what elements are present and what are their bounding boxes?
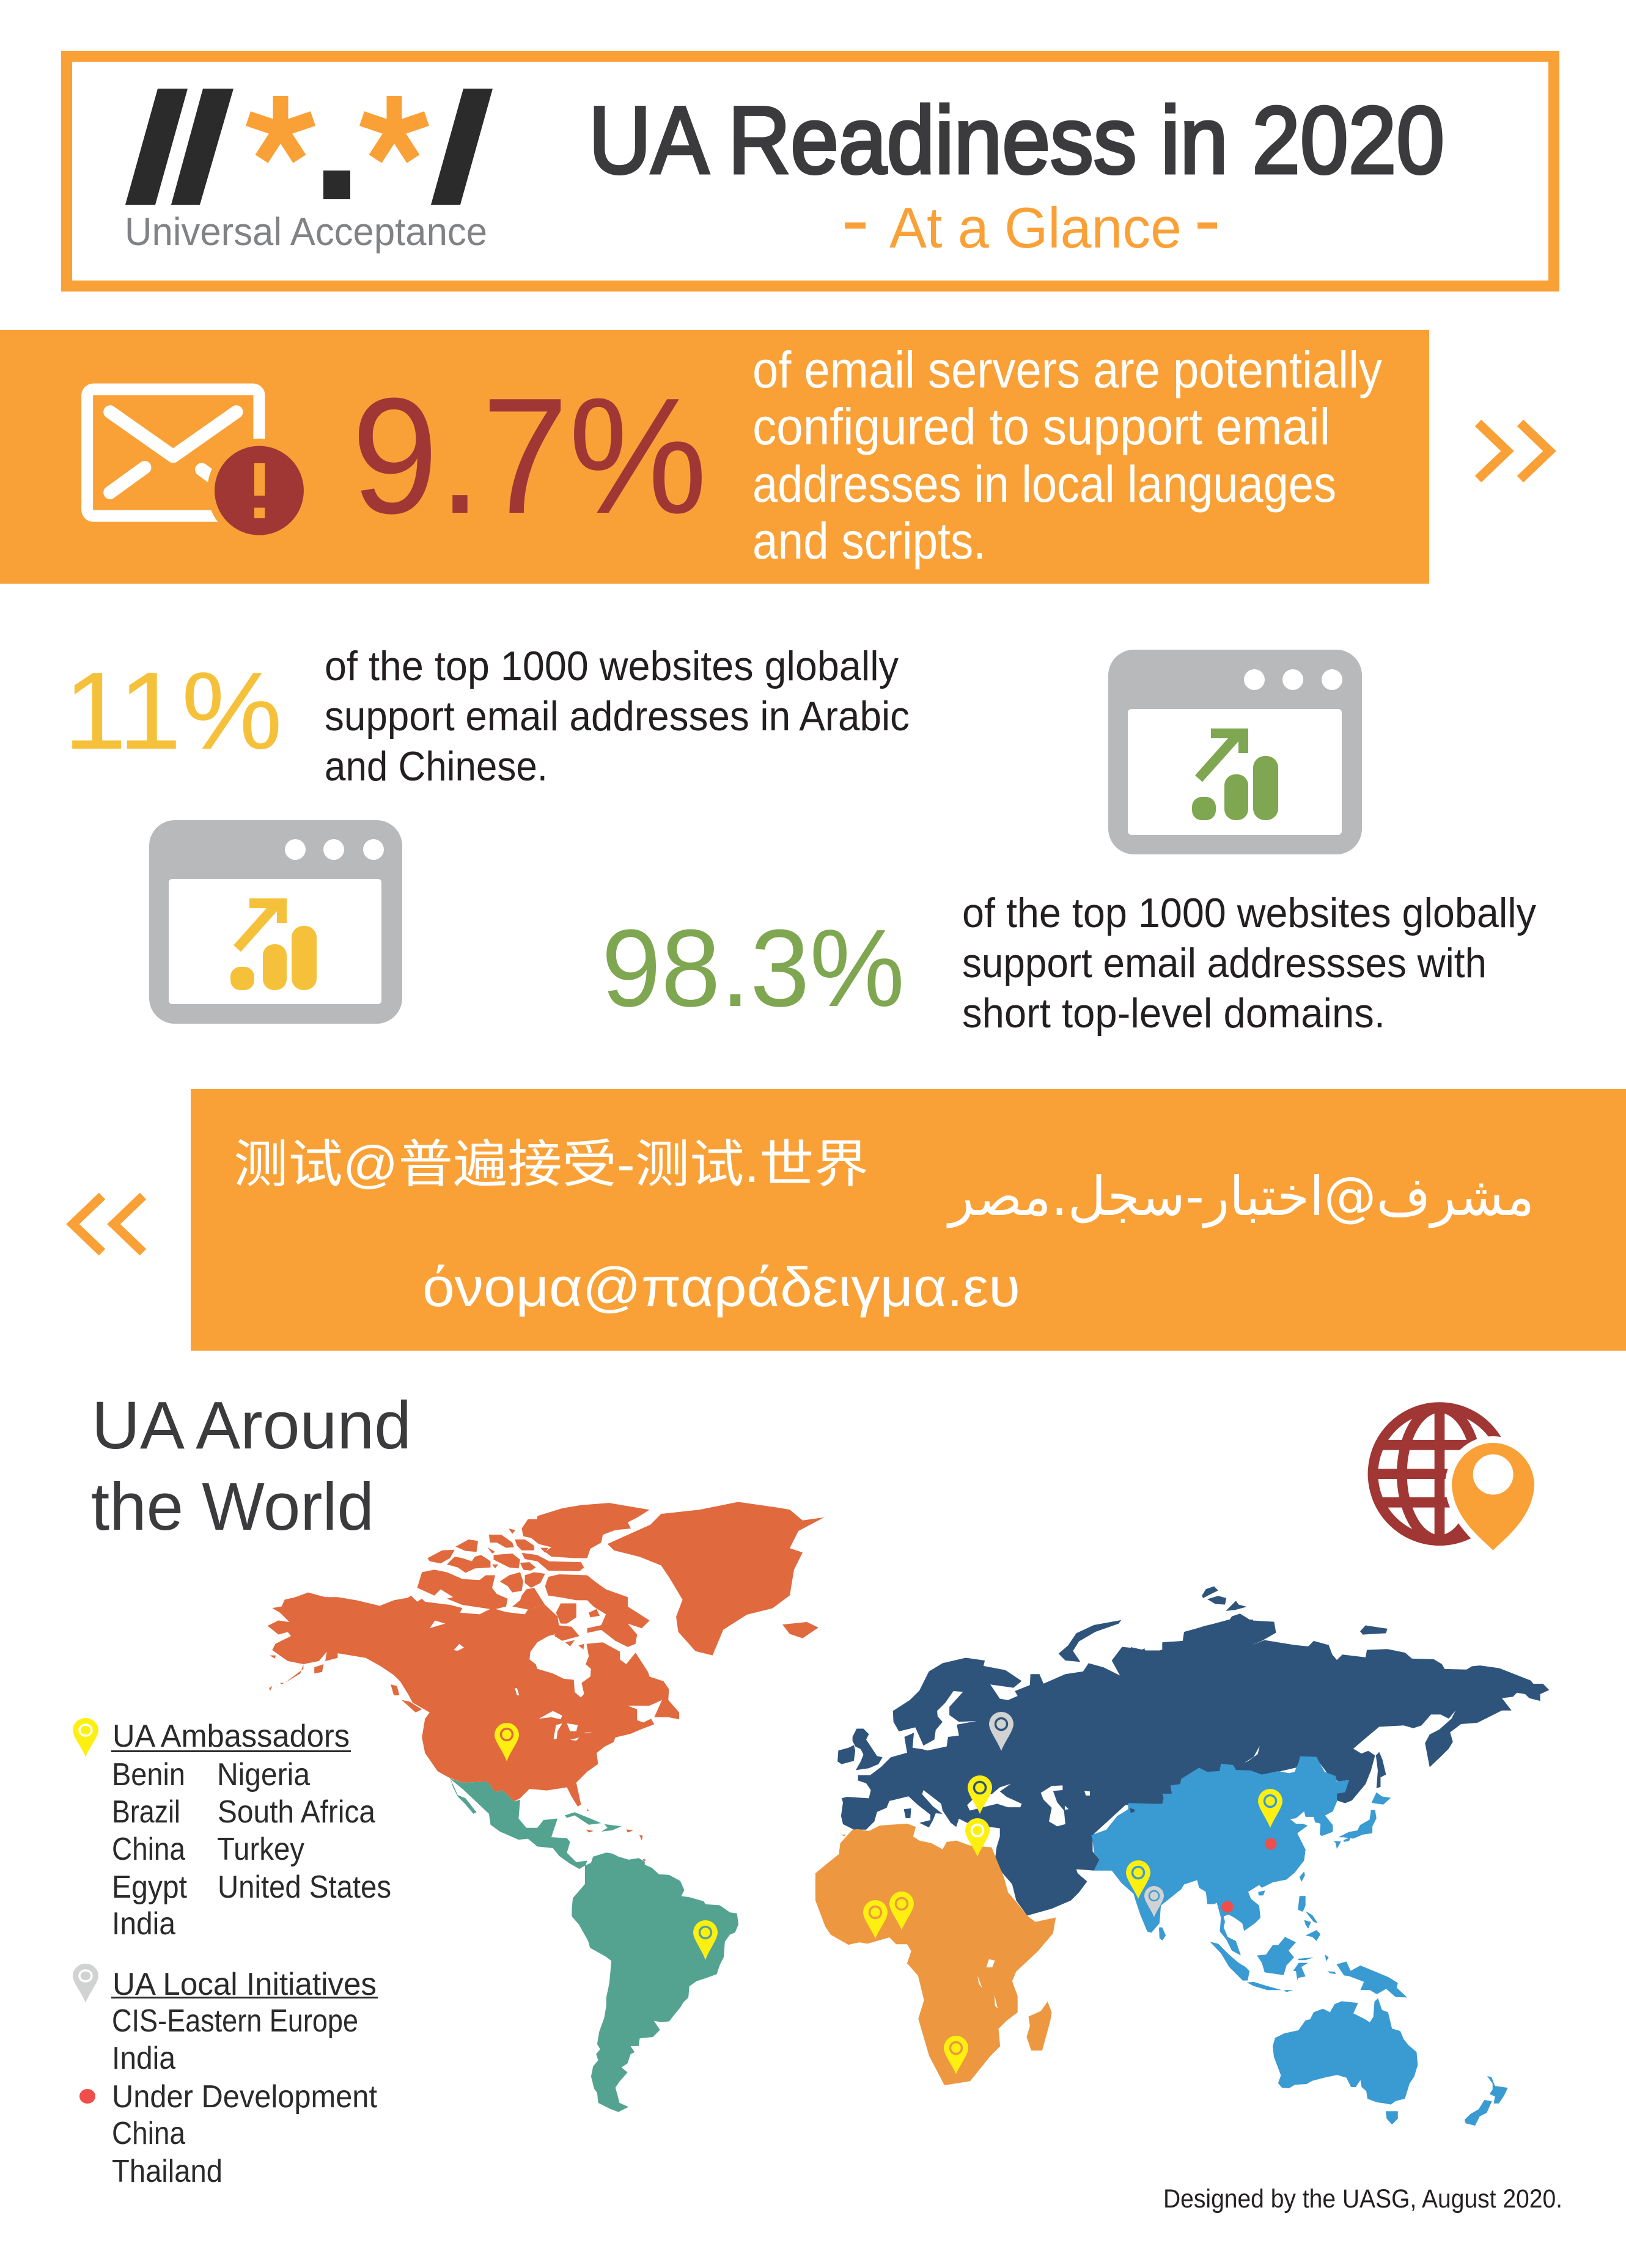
legend: local initiatives list: [112, 2003, 358, 2076]
text: 11% description: of the top 1000 websites globally: [325, 643, 899, 689]
legend: under development marker: [79, 2089, 95, 2104]
text: 98.3% description: [962, 890, 1536, 1037]
legend: ambassadors list: Turkey: [217, 1832, 304, 1867]
legend: ambassadors list: Nigeria: [217, 1757, 310, 1793]
stat 98.3%: 98.3%: [601, 907, 905, 1030]
pin: United States: [495, 1723, 519, 1761]
stat 9.7%: 9.7%: [351, 364, 707, 548]
heading: UA Around the World: UA Around: [92, 1388, 411, 1463]
text: 11% description: support email addresses in Arabic: [325, 693, 910, 739]
logo mark: [125, 89, 493, 205]
legend: [73, 1718, 391, 2189]
pin: India local initiative: [1144, 1886, 1164, 1917]
legend: ambassadors list: United States: [218, 1870, 391, 1905]
pin: Brazil: [693, 1920, 718, 1960]
stat description: addresses in local languages: [752, 455, 1336, 513]
map: Greenland and Iceland: [608, 1502, 824, 1656]
world map: [268, 1502, 1549, 2126]
icon: envelope with alert: [87, 389, 311, 543]
title: UA Readiness in 2020: [589, 87, 1444, 194]
panel: email stat band: [0, 330, 1429, 584]
legend: ambassadors list: China: [112, 1832, 185, 1867]
example: Arabic address: مشرف@اختبار-سجل.مصر: [946, 1165, 1534, 1228]
legend: local initiatives heading: UA Local Initiatives: [112, 1967, 377, 2002]
arrow: right chevrons: [1478, 423, 1550, 479]
map: South America: [572, 1852, 738, 2112]
pin: Nigeria: [889, 1892, 914, 1930]
map: Caribbean territories: [586, 1808, 647, 1862]
legend: under development list: China: [112, 2116, 185, 2151]
legend: local initiatives pin: [73, 1964, 98, 2003]
legend: ambassadors list: Benin: [112, 1757, 185, 1793]
stat description: [752, 341, 1382, 570]
icon: globe with location pin: [1367, 1401, 1534, 1551]
pin: Egypt: [965, 1818, 990, 1857]
example: Chinese address: 测试@普遍接受-测试.世界: [234, 1136, 869, 1193]
legend: local initiatives list: India: [112, 2041, 175, 2076]
pin: Benin: [863, 1900, 888, 1939]
map: Arctic islands: [418, 1503, 650, 1650]
stat description: and scripts.: [752, 512, 986, 570]
legend: ambassadors pin: [73, 1718, 98, 1757]
example: Greek address: όνομα@παράδειγμα.ευ: [422, 1257, 1020, 1318]
map: East and South Asia: [1091, 1756, 1391, 1992]
pin: Turkey: [968, 1775, 992, 1814]
legend: local initiatives list: CIS-Eastern Europe: [112, 2003, 358, 2039]
legend: ambassadors heading: UA Ambassadors: [112, 1719, 350, 1754]
heading: UA Around the World: [91, 1388, 411, 1544]
pin: Eastern Europe: [989, 1712, 1013, 1751]
text: 11% description: and Chinese.: [325, 743, 548, 790]
map: Australia and Oceania: [1273, 1961, 1508, 2126]
text: 98.3% description: of the top 1000 websites globally: [962, 890, 1536, 936]
map: Mexico and Central America: [449, 1778, 622, 1869]
text: 98.3% description: support email addressses with: [962, 940, 1487, 986]
legend: ambassadors list: Egypt: [112, 1870, 187, 1905]
map: Africa: [815, 1824, 1056, 2085]
heading: UA Around the World: the World: [91, 1469, 374, 1544]
stat description: of email servers are potentially: [752, 341, 1382, 398]
pin: South Africa: [944, 2036, 968, 2074]
map: Russia east: [1131, 1587, 1549, 1806]
icon: browser window green chart: [1108, 650, 1362, 854]
legend: ambassadors list: [112, 1757, 391, 1942]
subtitle: At a Glance: [889, 196, 1182, 260]
text: 11% description: [325, 643, 910, 790]
stat 11%: 11%: [64, 650, 282, 773]
legend: ambassadors list: India: [112, 1906, 175, 1942]
credit: Designed by the UASG, August 2020.: [1163, 2184, 1562, 2214]
legend: under development list: Thailand: [112, 2154, 223, 2189]
stat description: configured to support email: [752, 398, 1330, 455]
legend: ambassadors list: South Africa: [218, 1794, 375, 1830]
legend: under development list: [112, 2079, 378, 2189]
marker: Thailand under development: [1221, 1901, 1234, 1913]
pin: India ambassador: [1126, 1860, 1150, 1899]
map: lakes: [430, 1621, 593, 1741]
panel: internationalized email examples: [191, 1089, 1626, 1351]
map: North America: [268, 1503, 679, 1862]
header panel: [67, 56, 1554, 286]
text: 98.3% description: short top-level domains.: [962, 990, 1385, 1037]
legend: ambassadors list: Brazil: [112, 1794, 180, 1830]
legend: under development list: Under Development: [112, 2079, 378, 2115]
map: inland seas: [967, 1656, 1141, 1826]
icon: browser window yellow chart: [149, 820, 402, 1024]
pin: China: [1258, 1789, 1282, 1828]
arrow: left chevrons: [73, 1196, 143, 1252]
logo wordmark: Universal Acceptance: [125, 210, 487, 254]
map: Europe, West Asia and Middle East: [837, 1620, 1253, 1915]
marker: China under development: [1265, 1838, 1276, 1849]
